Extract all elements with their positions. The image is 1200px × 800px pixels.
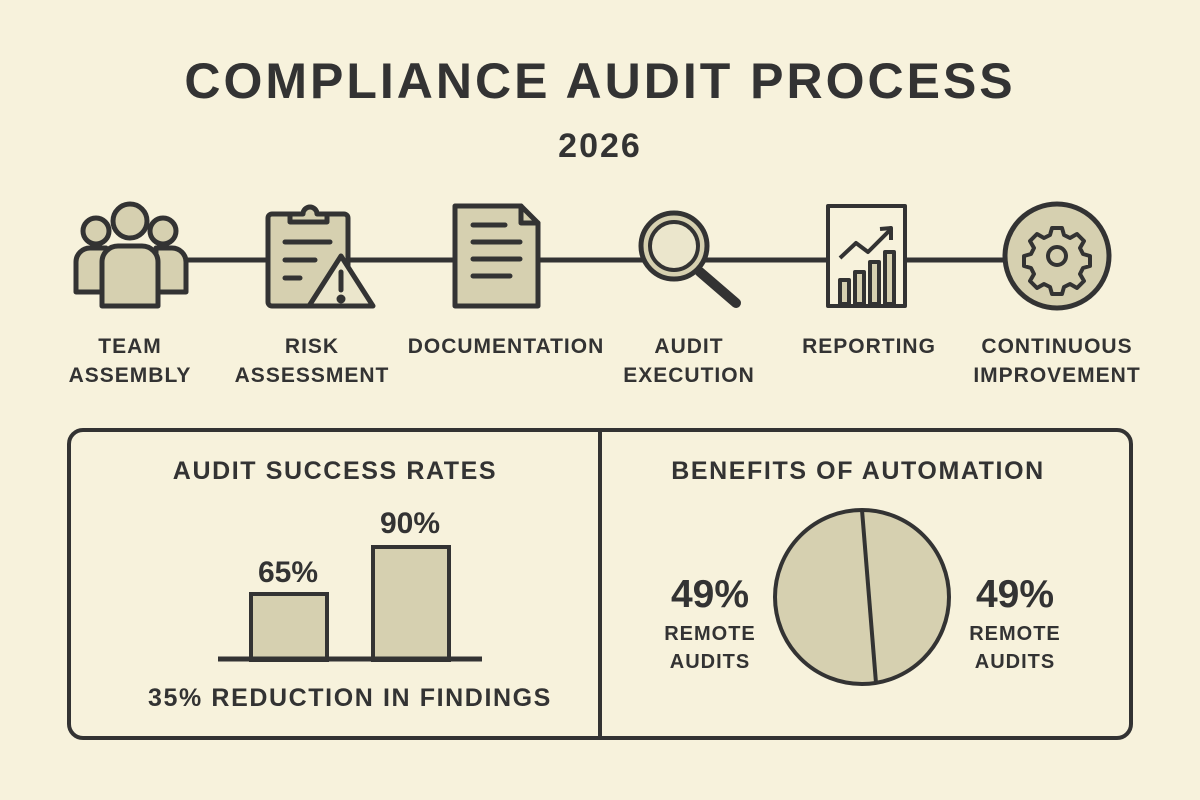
panel frame: [69, 430, 1131, 738]
icon: team: [76, 204, 186, 306]
step labels: IMPROVEMENT: [973, 364, 1141, 387]
icon: risk clipboard: [268, 207, 373, 306]
subtitle year: 2026: [558, 127, 642, 165]
icon: gear circle: [1005, 204, 1109, 308]
panel: audit success rates: [148, 457, 552, 712]
step labels: TEAM: [98, 335, 162, 358]
step labels: DOCUMENTATION: [408, 335, 604, 358]
step labels: CONTINUOUS: [981, 335, 1133, 358]
timeline connector: [150, 258, 1030, 262]
panel: benefits of automation: REMOTE: [969, 623, 1061, 645]
panel: benefits of automation: 49%: [976, 573, 1054, 616]
step labels: ASSESSMENT: [235, 364, 389, 387]
title: COMPLIANCE AUDIT PROCESS: [184, 53, 1016, 109]
step labels: RISK: [285, 335, 339, 358]
panel: benefits of automation: REMOTE: [664, 623, 756, 645]
panel: audit success rates: AUDIT SUCCESS RATES: [173, 457, 497, 485]
panel: audit success rates: 65%: [258, 556, 318, 589]
step labels: AUDIT: [654, 335, 724, 358]
panel: audit success rates: 90%: [380, 507, 440, 540]
panel: benefits of automation: [664, 457, 1061, 684]
step labels: [69, 335, 1141, 387]
panel: audit success rates: 35% REDUCTION IN FINDINGS: [148, 684, 552, 712]
panel: benefits of automation: AUDITS: [670, 651, 750, 673]
icon: documentation: [455, 206, 538, 306]
icon: reporting chart: [828, 206, 905, 306]
step labels: REPORTING: [802, 335, 936, 358]
step labels: ASSEMBLY: [69, 364, 191, 387]
icon: magnifier: [641, 213, 736, 303]
panel: benefits of automation: BENEFITS OF AUTOMATION: [671, 457, 1045, 485]
panel: benefits of automation: AUDITS: [975, 651, 1055, 673]
step labels: EXECUTION: [623, 364, 755, 387]
panel: benefits of automation: 49%: [671, 573, 749, 616]
